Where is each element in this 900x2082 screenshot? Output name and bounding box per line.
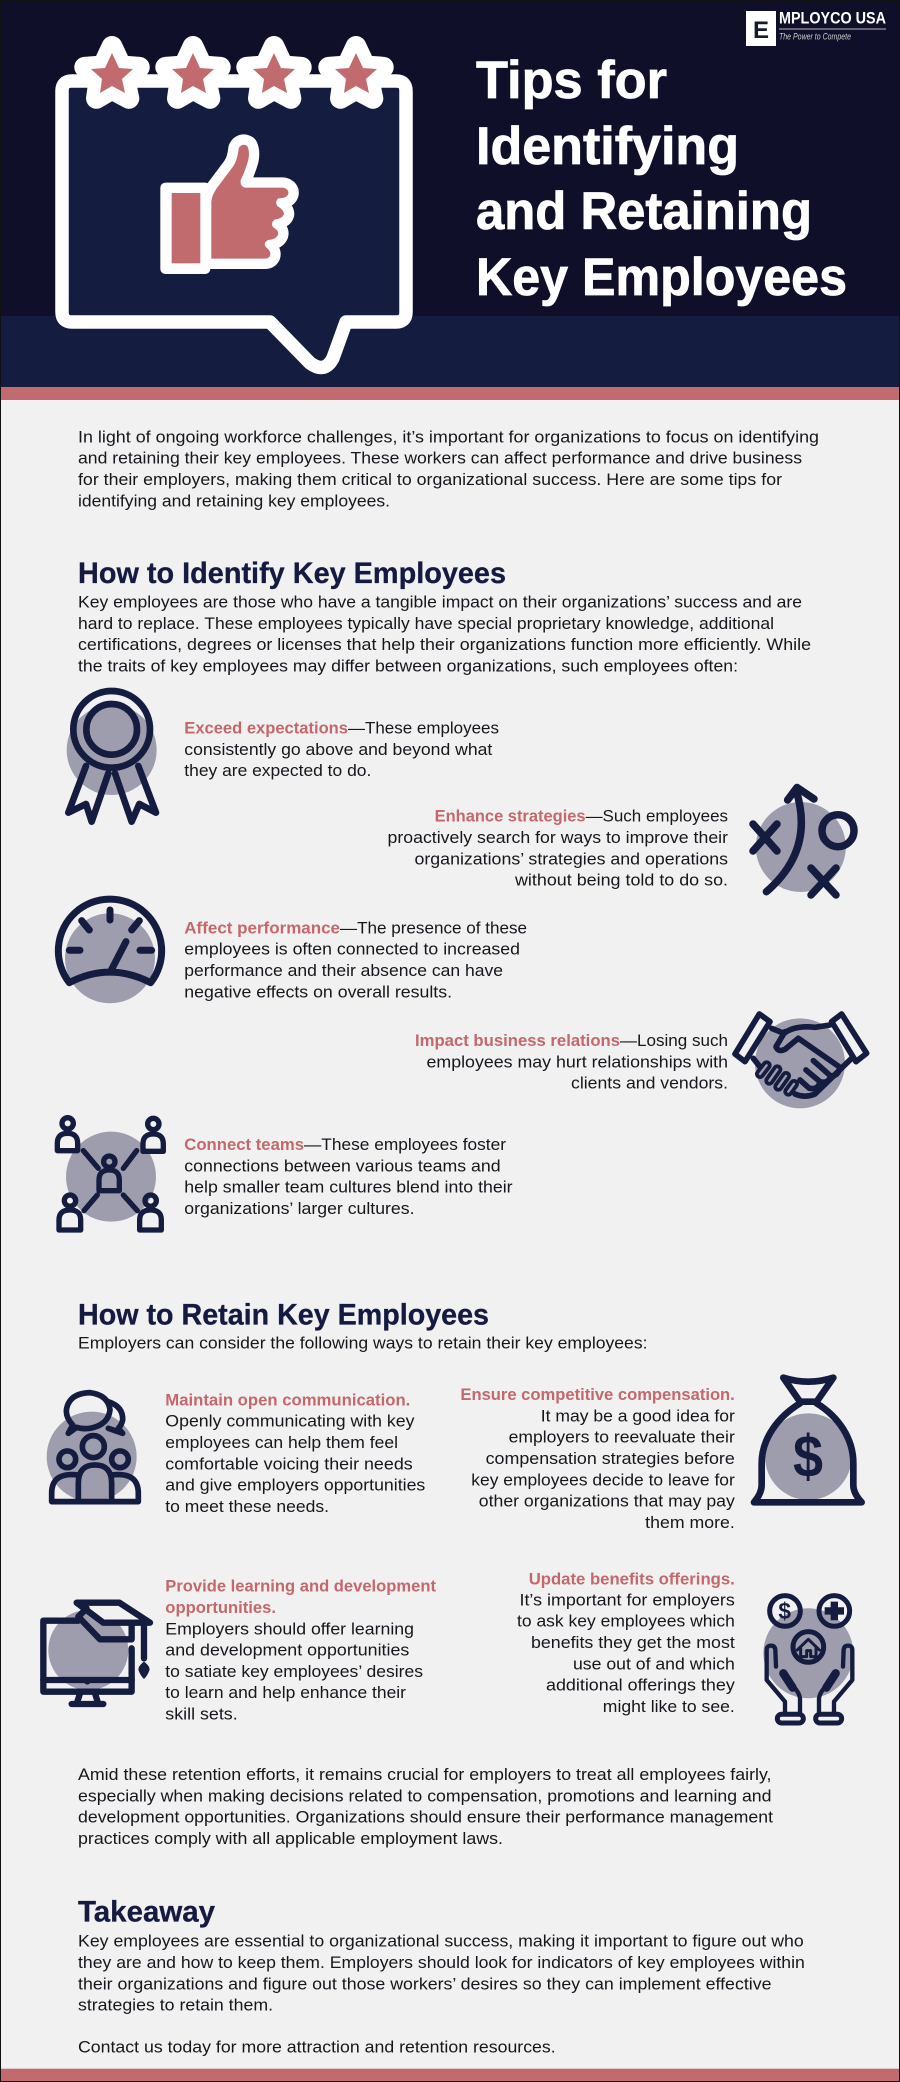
fairness paragraph: Amid these retention efforts, it remains crucial for employers to treat all employees fairly, bbox=[78, 1765, 772, 1784]
item: maintain open communication: comfortable voicing their needs bbox=[165, 1454, 413, 1473]
item: impact business relations: employees may hurt relationships with bbox=[426, 1052, 728, 1071]
item: maintain open communication: and give employers opportunities bbox=[165, 1476, 425, 1495]
title: Key Employees bbox=[476, 248, 847, 307]
identify paragraph: certifications, degrees or licenses that help their organizations function more efficiently. While bbox=[78, 635, 811, 654]
identify paragraph: Key employees are those who have a tangible impact on their organizations’ success and are bbox=[78, 592, 802, 612]
item: provide learning and development: opportunities. bbox=[165, 1598, 276, 1617]
footer bar bbox=[0, 2069, 900, 2082]
speech bubble bbox=[62, 81, 406, 367]
intro paragraph: In light of ongoing workforce challenges, it’s important for organizations to focus on identifying bbox=[78, 427, 819, 446]
item: provide learning and development bbox=[165, 1577, 436, 1724]
heading: takeaway: Takeaway bbox=[78, 1896, 215, 1929]
item: enhance strategies: proactively search for ways to improve their bbox=[388, 828, 728, 847]
item: maintain open communication: Openly communicating with key bbox=[165, 1412, 415, 1431]
item: provide learning and development: Employers should offer learning bbox=[165, 1619, 414, 1638]
logo: MPLOYCO USA bbox=[779, 10, 886, 28]
intro paragraph: and retaining their key employees. These workers can affect performance and drive business bbox=[78, 449, 802, 468]
item: impact business relations: —Losing such bbox=[620, 1031, 728, 1050]
header banner bbox=[0, 0, 900, 400]
item: ensure competitive compensation: them more. bbox=[645, 1513, 735, 1532]
icon: connected team bbox=[57, 1118, 163, 1230]
title: Tips for bbox=[476, 51, 667, 110]
identify paragraph bbox=[78, 592, 811, 676]
heading: how to retain: How to Retain Key Employees bbox=[78, 1298, 489, 1331]
item: provide learning and development: and development opportunities bbox=[165, 1641, 409, 1660]
item: ensure competitive compensation: employers to reevaluate their bbox=[509, 1428, 735, 1447]
item: exceed expectations: consistently go above and beyond what bbox=[184, 740, 493, 759]
small dollar: $ bbox=[778, 1598, 791, 1624]
item: maintain open communication: employees can help them feel bbox=[165, 1433, 398, 1452]
item: ensure competitive compensation: other organizations that may pay bbox=[479, 1492, 735, 1511]
logo: E bbox=[753, 17, 769, 44]
item: update benefits offerings: additional offerings they bbox=[546, 1676, 735, 1695]
icon: money bag bbox=[754, 1378, 862, 1502]
title: and Retaining bbox=[476, 182, 812, 241]
item: enhance strategies: organizations’ strategies and operations bbox=[414, 849, 728, 868]
stars bbox=[85, 46, 383, 98]
logo: The Power to Compete bbox=[779, 32, 851, 42]
item: impact business relations bbox=[415, 1031, 728, 1093]
item: update benefits offerings: It’s important for employers bbox=[520, 1590, 735, 1609]
item: update benefits offerings: to ask key employees which bbox=[517, 1612, 735, 1631]
item: connect teams bbox=[184, 1135, 513, 1218]
item: enhance strategies: without being told to do so. bbox=[514, 871, 728, 890]
icon: monitor with graduation cap bbox=[43, 1603, 150, 1704]
item: connect teams: organizations’ larger cultures. bbox=[184, 1199, 414, 1218]
takeaway paragraph: strategies to retain them. bbox=[78, 1996, 273, 2015]
item: connect teams: —These employees foster bbox=[304, 1135, 506, 1154]
icon: hands holding benefits bbox=[763, 1596, 853, 1723]
identify paragraph: hard to replace. These employees typically have special proprietary knowledge, additional bbox=[78, 614, 774, 633]
item: provide learning and development: to learn and help enhance their bbox=[165, 1683, 406, 1702]
intro paragraph: identifying and retaining key employees. bbox=[78, 491, 390, 510]
item: affect performance: performance and their absence can have bbox=[184, 961, 503, 980]
item: ensure competitive compensation: Ensure competitive compensation. bbox=[460, 1385, 735, 1404]
item: exceed expectations: Exceed expectations bbox=[184, 718, 348, 738]
item: update benefits offerings bbox=[517, 1569, 735, 1716]
fairness paragraph: development opportunities. Organizations should ensure their performance management bbox=[78, 1808, 773, 1827]
fairness paragraph bbox=[78, 1765, 773, 1848]
item: exceed expectations bbox=[184, 718, 499, 780]
icon: handshake bbox=[735, 1014, 867, 1108]
item: update benefits offerings: Update benefits offerings. bbox=[529, 1569, 735, 1588]
item: exceed expectations: —These employees bbox=[348, 718, 499, 738]
item: enhance strategies: Enhance strategies bbox=[435, 807, 586, 826]
item: affect performance: negative effects on overall results. bbox=[184, 982, 452, 1001]
item: affect performance: Affect performance bbox=[184, 918, 340, 937]
item: impact business relations: Impact business relations bbox=[415, 1031, 620, 1050]
item: connect teams: help smaller team cultures blend into their bbox=[184, 1178, 513, 1197]
retain intro: Employers can consider the following ways to retain their key employees: bbox=[78, 1334, 648, 1353]
heading: how to identify: How to Identify Key Employees bbox=[78, 557, 506, 590]
item: provide learning and development: to satiate key employees’ desires bbox=[165, 1662, 423, 1681]
item: connect teams: connections between various teams and bbox=[184, 1156, 501, 1175]
item: ensure competitive compensation: key employees decide to leave for bbox=[471, 1470, 735, 1489]
takeaway paragraph: Key employees are essential to organizational success, making it important to figure out who bbox=[78, 1932, 804, 1951]
item: maintain open communication: to meet these needs. bbox=[165, 1497, 329, 1516]
dollar sign: $ bbox=[793, 1422, 823, 1489]
icon: strategy play bbox=[753, 788, 854, 895]
contact line: Contact us today for more attraction and retention resources. bbox=[78, 2038, 556, 2057]
item: ensure competitive compensation bbox=[460, 1385, 735, 1532]
item: ensure competitive compensation: compensation strategies before bbox=[486, 1449, 735, 1468]
takeaway paragraph: they are and how to keep them. Employers should look for indicators of key employees within bbox=[78, 1953, 805, 1972]
takeaway paragraph bbox=[78, 1932, 805, 2015]
item: enhance strategies bbox=[388, 807, 728, 890]
item: update benefits offerings: benefits they get the most bbox=[531, 1633, 735, 1652]
item: affect performance bbox=[184, 918, 527, 1001]
icon: team communication bbox=[47, 1393, 138, 1502]
logo bbox=[746, 10, 886, 46]
item: provide learning and development: skill sets. bbox=[165, 1704, 238, 1724]
item: impact business relations: clients and vendors. bbox=[571, 1074, 728, 1093]
intro paragraph bbox=[78, 427, 819, 510]
takeaway paragraph: their organizations and figure out those workers’ desires so they can implement effective bbox=[78, 1974, 772, 1993]
item: maintain open communication: Maintain open communication. bbox=[165, 1390, 410, 1409]
item: connect teams: Connect teams bbox=[184, 1135, 304, 1154]
item: maintain open communication bbox=[165, 1390, 425, 1516]
item: affect performance: employees is often connected to increased bbox=[184, 940, 520, 959]
item: update benefits offerings: use out of and which bbox=[573, 1654, 735, 1673]
item: update benefits offerings: might like to see. bbox=[603, 1697, 735, 1716]
fairness paragraph: especially when making decisions related to compensation, promotions and learning and bbox=[78, 1786, 772, 1805]
icon: award ribbon bbox=[67, 691, 157, 822]
title bbox=[476, 51, 847, 307]
item: provide learning and development: Provide learning and development bbox=[165, 1577, 436, 1596]
item: enhance strategies: —Such employees bbox=[586, 807, 728, 826]
item: exceed expectations: they are expected to do. bbox=[184, 761, 371, 780]
thumbs up bbox=[165, 145, 288, 269]
intro paragraph: for their employers, making them critical to organizational success. Here are some tips for bbox=[78, 470, 782, 489]
item: affect performance: —The presence of these bbox=[340, 918, 527, 937]
identify paragraph: the traits of key employees may differ between organizations, such employees often: bbox=[78, 656, 738, 676]
title: Identifying bbox=[476, 117, 739, 176]
icon: speedometer gauge bbox=[58, 899, 162, 1003]
item: ensure competitive compensation: It may be a good idea for bbox=[541, 1406, 735, 1425]
fairness paragraph: practices comply with all applicable employment laws. bbox=[78, 1829, 503, 1848]
icon: speech bubble with stars and thumbs up bbox=[62, 46, 406, 367]
